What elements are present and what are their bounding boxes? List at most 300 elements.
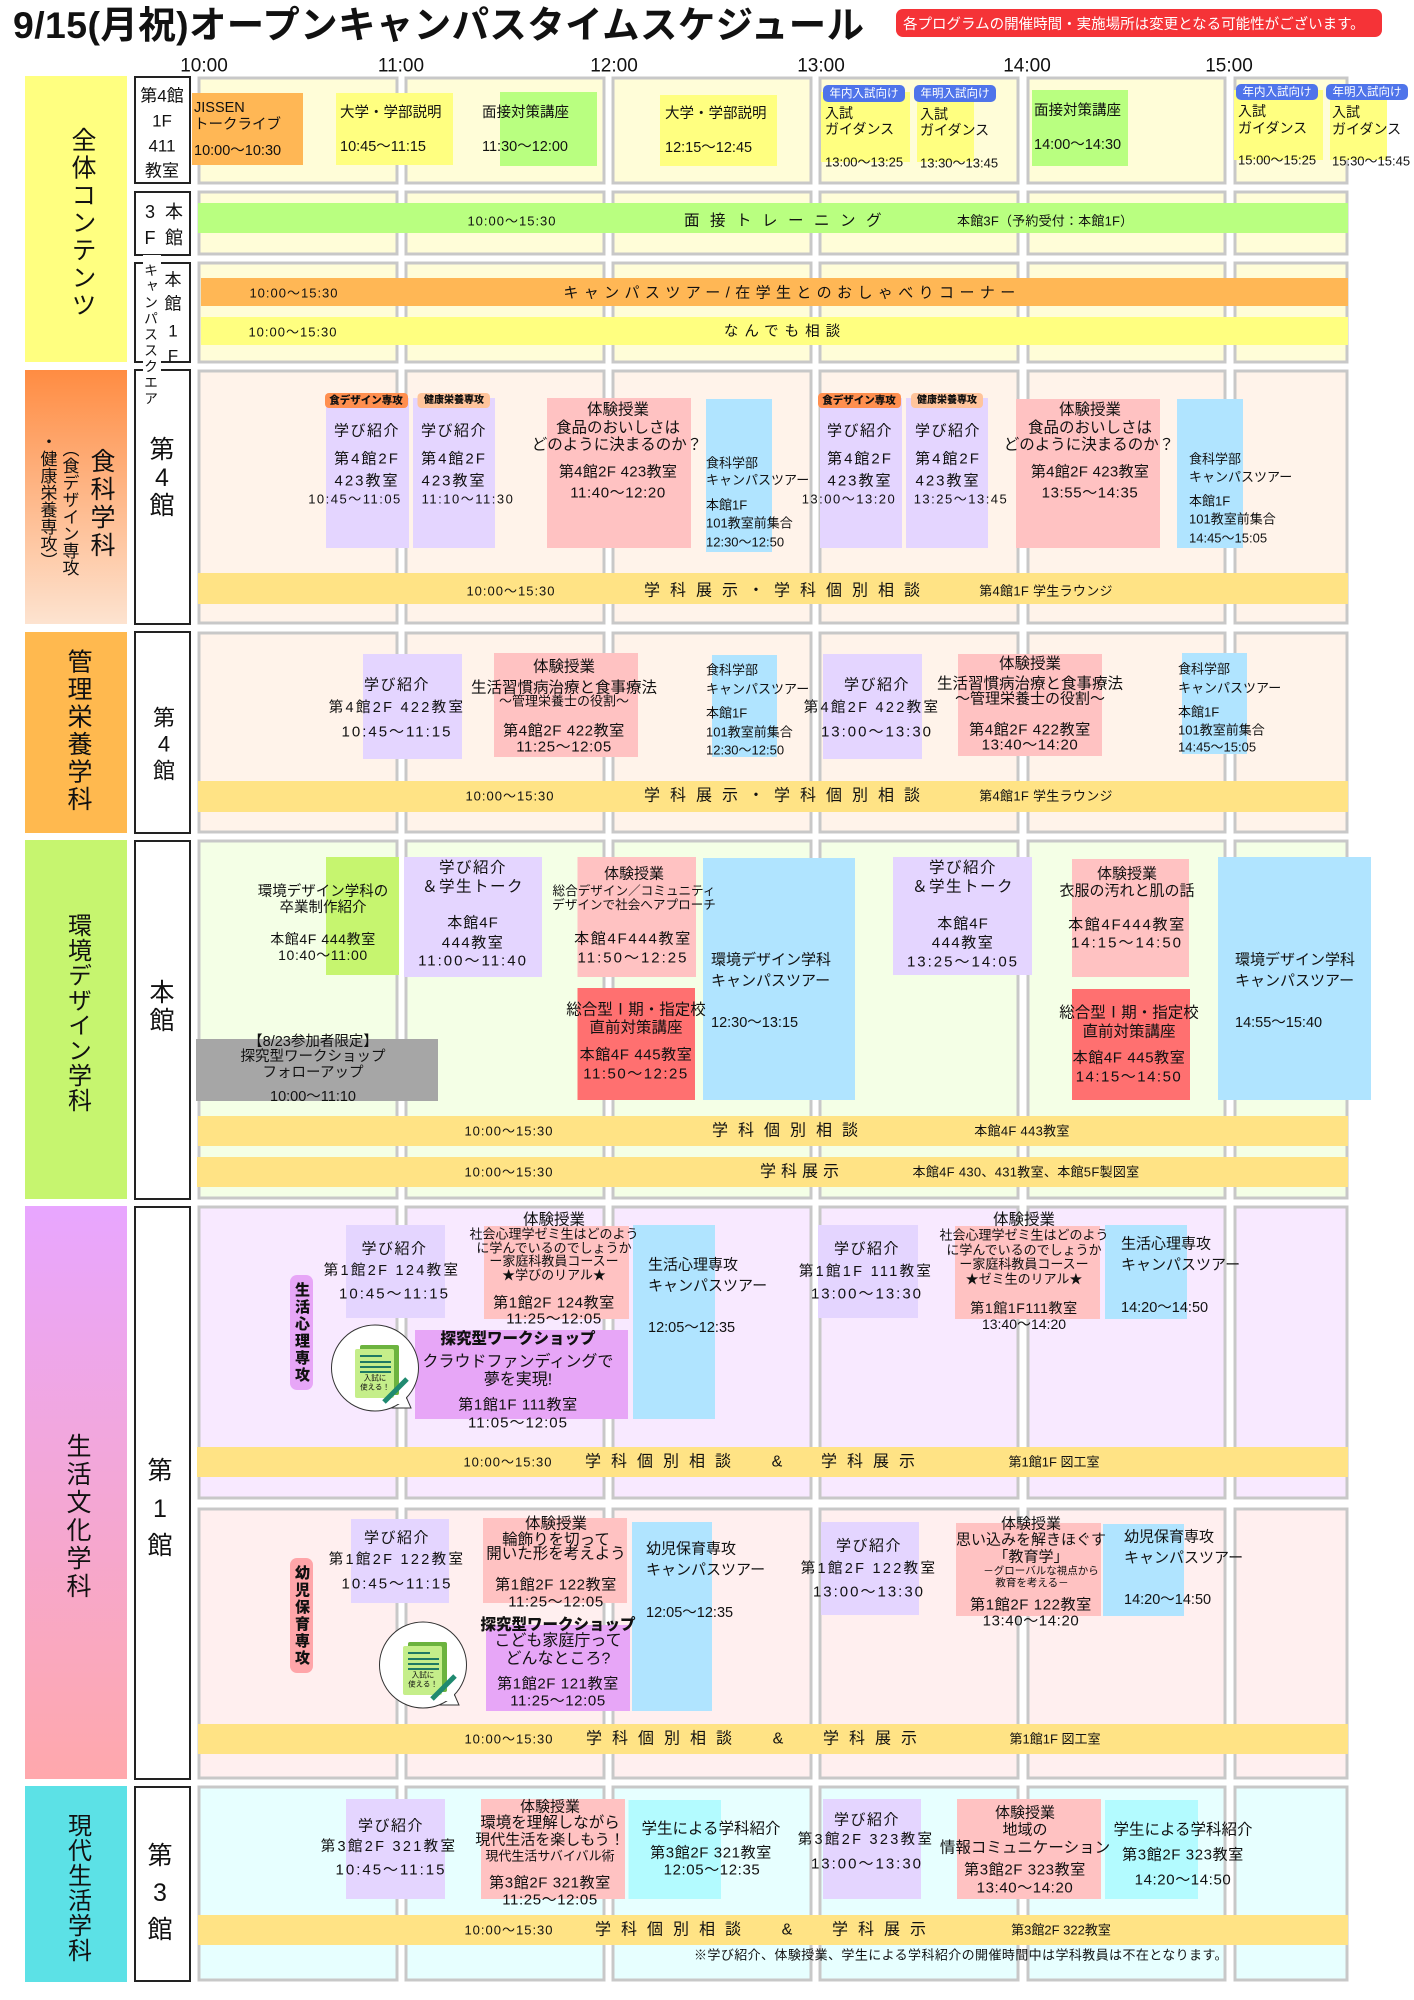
section label: 食科学科: 食科学科 (87, 448, 116, 560)
band: 学科個別相談 & 学科展示 (幼児保育) (198, 1724, 1348, 1754)
building: 第4館: 館 (153, 758, 175, 784)
event: 食科学部キャンパスツアー 14:45 (1178, 653, 1281, 754)
event: 総合型Ⅰ期・指定校 直前対策講座 11:50: 本館4F 445教室 (580, 1046, 692, 1064)
panel: 環境デザイン学科 (25, 840, 1371, 1199)
event: 学び紹介 13:00: 学び紹介 (834, 1240, 900, 1258)
event: 探究型ワークショップ クラウドファンディング: 11:05～12:05 (468, 1414, 568, 1432)
footnote: ※学び紹介、体験授業、学生による学科紹介の開催時間中は学科教員は不在となります。 (694, 1948, 1228, 1962)
event: 学び紹介＆学生トーク 11:00: 本館4F (447, 914, 499, 932)
band: 学科個別相談 & 学科展示 (幼児保育): & (773, 1730, 784, 1748)
event: 体験授業 14:15 (1059, 859, 1195, 977)
event: 面接対策講座 2: 面接対策講座 (1034, 102, 1121, 119)
event: 学生による学科紹介 12:05: 第3館2F 321教室 (650, 1844, 772, 1862)
event: 学び紹介 食デザイン 10:45: 第4館2F (334, 450, 400, 468)
event: 体験授業 13:40: 思い込みを解きほぐす (956, 1532, 1106, 1548)
event: 学び紹介 健康栄養 11:10 (413, 393, 514, 548)
event: 体験授業 13:40 (940, 1799, 1110, 1899)
event: 体験授業 13:55: 第4館2F 423教室 (1031, 464, 1149, 480)
event: 体験授業 13:40: 地域の (1002, 1822, 1048, 1838)
building: 第4館: 第 (153, 706, 175, 730)
event: 学生による学科紹介 12:05: 12:05～12:35 (664, 1862, 760, 1878)
event: JISSENトークライブ: 10:00～10:30 (194, 143, 281, 159)
band: 学科展示・学科個別相談: 10:00～15:30 (466, 584, 556, 598)
section label: 環境デザイン学科 (25, 840, 127, 1199)
event: 体験授業 11:25: ～管理栄養士の役割～ (499, 694, 629, 708)
event: 体験授業 13:40: ～管理栄養士の役割～ (955, 690, 1105, 708)
event: 学び紹介 健康栄養 13:25: 423教室 (915, 472, 981, 490)
event: 学び紹介 10:45: 10:45～11:15 (342, 1576, 452, 1592)
event: 学び紹介 食デザイン 13:00: 食デザイン専攻 (822, 394, 896, 406)
event: 学び紹介 13:00: 13:00～13:30 (811, 1286, 923, 1302)
event: 体験授業 11:50 (552, 857, 716, 977)
event: 学び紹介 食デザイン 13:00: 423教室 (827, 472, 893, 490)
event: 体験授業 13:40: 第4館2F 422教室 (969, 722, 1091, 738)
event: 体験授業 11:25: に学んでいるのでしょうか (476, 1240, 632, 1256)
event: JISSENトークライブ: トークライブ (194, 115, 281, 133)
event: 入試ガイダンス 15:00: 15:00～15:25 (1238, 152, 1316, 168)
event: 入試ガイダンス 13:30 (914, 85, 998, 170)
event: 環境デザイン学科キャンパスツアー 14:55 (1218, 857, 1371, 1100)
grid row (199, 633, 1347, 832)
event: 面接対策講座 1: 面接対策講座 (482, 104, 569, 121)
event: 学び紹介＆学生トーク 11:00: 学び紹介 (439, 858, 507, 876)
event: 総合型Ⅰ期・指定校 直前対策講座 14:15 (1059, 989, 1199, 1100)
event: 学び紹介 13:00: 学び紹介 (836, 1538, 902, 1554)
event: 大学・学部説明 1 (336, 93, 453, 165)
event: 体験授業 13:40: 「教育学」 (993, 1548, 1069, 1566)
event: 体験授業 11:25: 体験授業 (520, 1798, 580, 1816)
building: 第4館1F411教室: 411 (148, 136, 176, 156)
event: 卒業制作紹介: 10:40～11:00 (278, 947, 368, 963)
event: 学び紹介 10:45 (324, 1225, 460, 1318)
time axis: 14:00 (1003, 56, 1051, 76)
event: 体験授業 13:55: 13:55～14:35 (1042, 484, 1138, 502)
event: 体験授業 13:40: ー家庭科教員コースー (959, 1256, 1089, 1272)
band: 学科個別相談 & 学科展示: 第3館2F 322教室 (1011, 1922, 1111, 1938)
panel: 食科学科 (25, 370, 1348, 624)
icon: 入試に使える speech bubble: 使える！ (360, 1382, 390, 1392)
band: 学科個別相談 & 学科展示 (198, 1915, 1348, 1945)
event: 生活心理専攻キャンパスツアー 12:05: 生活心理専攻 (648, 1256, 738, 1274)
event: 体験授業 13:40: 情報コミュニケーション (940, 1838, 1110, 1856)
event: 学び紹介 健康栄養 11:10: 健康栄養専攻 (424, 393, 484, 406)
band: 学科個別相談 & 学科展示 (生活心理): 学科個別相談 (585, 1452, 741, 1470)
event: 学び紹介 食デザイン 10:45: 食デザイン専攻 (329, 394, 403, 406)
event: 学び紹介＆学生トーク 13:25 (893, 857, 1032, 975)
event: 体験授業 11:25: 体験授業 (523, 1210, 585, 1228)
section label: 食科学科: （食デザイン専攻 (60, 440, 79, 576)
event: 体験授業 13:40: 体験授業 (993, 1210, 1055, 1228)
event: 体験授業 14:15: 本館4F444教室 (1068, 916, 1186, 934)
section label: 現代生活学科 (25, 1786, 127, 1982)
event: 食科学部キャンパスツアー 12:30: 12:30～12:50 (706, 534, 784, 550)
event: 体験授業 11:25: 輪飾りを切って (502, 1530, 610, 1548)
band: 学科展示: 本館4F 430、431教室、本館5F製図室 (913, 1164, 1139, 1180)
band: 学科展示 (197, 1157, 1348, 1187)
event: 体験授業 11:25: 生活習慣病治療と食事療法 (471, 678, 657, 696)
event: 体験授業 11:25: 現代生活を楽しもう！ (475, 1832, 625, 1848)
event: 学び紹介＆学生トーク 13:25: 444教室 (932, 934, 994, 952)
section label: 現代生活学科: 現代生活学科 (64, 1813, 92, 1963)
building: 本館3F: 3 (145, 202, 155, 222)
event: 総合型Ⅰ期・指定校 直前対策講座 14:15: 総合型Ⅰ期・指定校 (1059, 1004, 1199, 1022)
grid row 3 (199, 263, 1347, 362)
event: JISSENトークライブ (192, 93, 303, 165)
event: 探究型ワークショップ クラウドファンディング: 夢を実現! (484, 1370, 552, 1388)
event: 体験授業 11:40: 11:40～12:20 (570, 484, 666, 502)
event: 探究型ワークショップ こども家庭庁: どんなところ? (506, 1650, 611, 1668)
event: 探究型ワークショップ クラウドファンディング (415, 1328, 628, 1432)
event: 学び紹介 食デザイン 13:00: 学び紹介 (827, 422, 893, 440)
event: 体験授業 13:40: 体験授業 (995, 1804, 1055, 1822)
event: 学び紹介 食デザイン 13:00: 第4館2F (827, 450, 893, 468)
event: 体験授業 13:40: －グローバルな視点から (983, 1564, 1099, 1577)
grid row: 幼児保育専攻 (199, 1509, 1347, 1778)
event: 体験授業 13:40 (939, 1210, 1109, 1332)
event: 学び紹介 10:45: 第1館2F 124教室 (324, 1262, 460, 1279)
building: 本館3F: F (144, 228, 156, 248)
panel: 全体コンテンツ (25, 76, 1410, 366)
band: 学科個別相談 (198, 1116, 1348, 1146)
tag: 幼児保育専攻: 幼児保育専攻 (293, 1564, 310, 1667)
title: 9/15(月祝)オープンキャンパスタイムスケジュール (13, 4, 864, 46)
event: 入試ガイダンス 15:00: ガイダンス (1238, 120, 1307, 136)
grid row 1 (199, 78, 1347, 183)
event: 生活心理専攻キャンパスツアー 12:05: 12:05～12:35 (648, 1320, 735, 1336)
event: 総合型Ⅰ期・指定校 直前対策講座 14:15: 直前対策講座 (1082, 1022, 1176, 1040)
event: 探究型ワークショップ フォローアップ: 【8/23参加者限定】 (248, 1033, 378, 1050)
band: 学科展示・学科個別相談: 学科展示・学科個別相談 (644, 786, 930, 804)
section label: 管理栄養学科: 管理栄養学科 (64, 648, 92, 814)
event: 学び紹介 10:45: 学び紹介 (361, 1240, 428, 1258)
event: 学び紹介 13:00: 13:00～13:30 (821, 724, 933, 740)
event: 生活心理専攻キャンパスツアー 14:20: 14:20～14:50 (1121, 1300, 1208, 1316)
event: 体験授業 11:40: 体験授業 (587, 400, 649, 418)
building: 第1館: 1 (153, 1495, 167, 1523)
band: 学科展示・学科個別相談: 第4館1F 学生ラウンジ (979, 788, 1113, 804)
event: 体験授業 11:25 (475, 1798, 625, 1908)
event: 体験授業 11:25: 環境を理解しながら (480, 1814, 620, 1832)
event: 体験授業 13:40: 教育を考える－ (995, 1576, 1069, 1589)
event: 食科学部キャンパスツアー 12:30: 食科学部 (706, 662, 758, 678)
event: 学び紹介 健康栄養 13:25: 13:25～13:45 (914, 492, 1008, 506)
tag: 生活心理専攻: 生活心理専攻 (293, 1281, 310, 1384)
grid row 2 (199, 192, 1347, 254)
event: 探究型ワークショップ フォローアップ: 探究型ワークショップ (240, 1048, 386, 1065)
building: 本館1F: F (168, 346, 178, 366)
event: 食科学部キャンパスツアー 14:45: 本館1F (1189, 494, 1230, 508)
event: 入試ガイダンス 15:00: 入試 (1238, 103, 1266, 119)
band: なんでも相談: なんでも相談 (724, 323, 846, 340)
event: 食科学部キャンパスツアー 14:45: 101教室前集合 (1178, 722, 1265, 738)
event: 体験授業 13:40: 第1館2F 122教室 (970, 1596, 1092, 1614)
event: 体験授業 11:50: 本館4F444教室 (574, 930, 692, 948)
event: 入試ガイダンス 13:30: ガイダンス (920, 122, 989, 138)
event: 体験授業 13:55: 体験授業 (1059, 400, 1121, 418)
event: 学び紹介 13:00 (801, 1522, 937, 1615)
band: 学科個別相談: 10:00～15:30 (464, 1124, 554, 1138)
event: 幼児保育専攻キャンパスツアー 12:05: 12:05～12:35 (646, 1605, 733, 1621)
event: 幼児保育専攻キャンパスツアー 14:20: キャンパスツアー (1124, 1550, 1243, 1566)
event: 学び紹介 食デザイン 13:00: 13:00～13:20 (802, 492, 896, 506)
building: 第4館: 4 (155, 464, 169, 492)
band: 学科展示・学科個別相談 (198, 781, 1348, 812)
event: 入試ガイダンス 13:30: 年明入試向け (920, 86, 990, 100)
event: 学生による学科紹介 14:20: 学生による学科紹介 (1113, 1820, 1253, 1838)
event: 食科学部キャンパスツアー 12:30: 本館1F (706, 706, 747, 720)
event: 食科学部キャンパスツアー 14:45: キャンパスツアー (1189, 470, 1292, 484)
building: 第3館: 館 (147, 1916, 173, 1944)
building: 本館3F (135, 192, 190, 255)
building: 本館: 本 (149, 979, 175, 1007)
grid row (199, 841, 1347, 1198)
event: 探究型ワークショップ こども家庭庁: 11:25～12:05 (510, 1692, 606, 1710)
event: 学び紹介 健康栄養 13:25: 健康栄養専攻 (917, 393, 977, 406)
event: 学び紹介 10:45 (321, 1799, 457, 1899)
event: 学び紹介 10:45: 学び紹介 (358, 1818, 424, 1834)
event: 学び紹介 13:00 (804, 654, 940, 759)
event: 入試ガイダンス 15:00: 年内入試向け (1242, 84, 1312, 98)
building: 第4館1F411教室: 1F (152, 112, 172, 130)
band: 学科個別相談: 学科個別相談 (712, 1122, 868, 1140)
event: 体験授業 13:40: 体験授業 (999, 654, 1061, 672)
event: 学び紹介 13:00 (799, 1225, 933, 1318)
event: 体験授業 11:40: どのように決まるのか？ (532, 436, 702, 454)
event: 学び紹介 食デザイン 10:45: 学び紹介 (334, 422, 400, 440)
event: 学び紹介 10:45: 第3館2F 321教室 (321, 1838, 457, 1855)
event: 探究型ワークショップ クラウドファンディング: 探究型ワークショップ (440, 1328, 596, 1348)
building: 第4館1F411教室 (135, 77, 190, 183)
event: 学び紹介 13:00 (798, 1799, 934, 1899)
event: 体験授業 14:15: 衣服の汚れと肌の話 (1059, 882, 1195, 900)
band: 面接トレーニング: 10:00～15:30 (467, 214, 557, 228)
event: 環境デザイン学科キャンパスツアー 12:30: 12:30～13:15 (711, 1015, 798, 1031)
band: 学科個別相談 & 学科展示 (生活心理): 学科展示 (821, 1452, 925, 1470)
event: 食科学部キャンパスツアー 14:45: 14:45～15:05 (1189, 530, 1267, 546)
event: 学生による学科紹介 14:20: 第3館2F 323教室 (1122, 1846, 1244, 1864)
event: 体験授業 13:40: 第1館1F111教室 (970, 1300, 1078, 1316)
event: 学び紹介 13:00: 13:00～13:30 (811, 1856, 923, 1872)
event: 体験授業 13:40: 体験授業 (1001, 1516, 1061, 1532)
time axis: 11:00 (378, 56, 424, 76)
panel: 管理栄養学科 (25, 632, 1348, 833)
event: 体験授業 11:50: 体験授業 (604, 866, 664, 882)
event: 食科学部キャンパスツアー 12:30 (706, 655, 809, 758)
event: 学び紹介 10:45 (329, 1519, 465, 1603)
event: 食科学部キャンパスツアー 14:45: 食科学部 (1178, 662, 1230, 676)
event: 大学・学部説明 2 (660, 95, 777, 166)
event: 体験授業 13:40: ★ゼミ生のリアル★ (966, 1272, 1082, 1286)
event: 生活心理専攻キャンパスツアー 14:20 (1105, 1225, 1240, 1319)
event: 学び紹介 10:45: 10:45～11:15 (342, 724, 452, 740)
event: 学び紹介 食デザイン 10:45 (308, 393, 409, 548)
event: 探究型ワークショップ こども家庭庁: こども家庭庁って (494, 1632, 622, 1650)
band: 学科個別相談 & 学科展示 (幼児保育): 第1館1F 図工室 (1009, 1732, 1101, 1746)
band: 学科個別相談 & 学科展示: 学科展示 (832, 1920, 936, 1938)
event: 卒業制作紹介 (258, 857, 399, 975)
event: 食科学部キャンパスツアー 12:30: 101教室前集合 (706, 516, 793, 530)
section label: 全体コンテンツ: 全体コンテンツ (68, 127, 96, 319)
band: 学科展示・学科個別相談: 学科展示・学科個別相談 (644, 582, 930, 600)
building: 第4館 (135, 370, 190, 624)
event: 体験授業 13:55 (1004, 399, 1174, 548)
event: 体験授業 14:15: 14:15～14:50 (1071, 934, 1183, 952)
event: 学び紹介 10:45: 学び紹介 (364, 1530, 430, 1546)
event: 学び紹介 13:00: 第1館2F 122教室 (801, 1560, 937, 1577)
panel: 生活文化学科 (25, 1206, 1348, 1779)
band: 学科個別相談: 本館4F 443教室 (974, 1124, 1070, 1138)
event: 体験授業 11:25: 第3館2F 321教室 (489, 1874, 611, 1892)
icon: 入試に使える speech bubble (332, 1325, 418, 1411)
tag: 生活心理専攻 (290, 1275, 313, 1390)
event: 食科学部キャンパスツアー 14:45: 本館1F (1178, 704, 1219, 720)
event: 幼児保育専攻キャンパスツアー 14:20 (1103, 1524, 1243, 1616)
event: 学生による学科紹介 12:05: 学生による学科紹介 (641, 1820, 781, 1838)
building: 本館 (135, 841, 190, 1199)
event: 体験授業 13:40: 13:40～14:20 (977, 1880, 1073, 1896)
event: 卒業制作紹介: 卒業制作紹介 (280, 899, 367, 916)
band: 学科個別相談 & 学科展示 (幼児保育): 学科展示 (823, 1730, 927, 1748)
event: 食科学部キャンパスツアー 12:30: 食科学部 (706, 456, 758, 470)
event: 学び紹介 食デザイン 10:45: 10:45～11:05 (308, 492, 402, 506)
event: 学び紹介 13:00: 13:00～13:30 (813, 1584, 925, 1600)
event: 面接対策講座 1: 11:30～12:00 (482, 139, 568, 155)
building: 本館3F: 本 (165, 202, 183, 222)
section label: 管理栄養学科 (25, 632, 127, 833)
event: 入試ガイダンス 15:00 (1234, 84, 1323, 168)
event: 大学・学部説明 2: 大学・学部説明 (665, 105, 766, 122)
section label: 環境デザイン学科: 環境デザイン学科 (64, 913, 92, 1113)
event: 学び紹介 10:45: 第1館2F 122教室 (329, 1551, 465, 1568)
building: 第4館: 4 (158, 732, 170, 756)
building: 本館1F: 館 (164, 294, 182, 314)
event: 環境デザイン学科キャンパスツアー 12:30 (703, 858, 855, 1100)
event: 体験授業 11:25: 体験授業 (533, 658, 595, 676)
event: 環境デザイン学科キャンパスツアー 14:55: 環境デザイン学科 (1235, 950, 1355, 968)
event: 環境デザイン学科キャンパスツアー 14:55: 14:55～15:40 (1235, 1015, 1322, 1031)
building: 第1館: 第 (147, 1457, 173, 1485)
event: 学び紹介 食デザイン 10:45: 423教室 (334, 472, 400, 490)
event: 探究型ワークショップ こども家庭庁: 第1館2F 121教室 (497, 1676, 619, 1692)
event: 体験授業 11:25 (469, 1210, 639, 1328)
event: 大学・学部説明 1: 10:45～11:15 (340, 139, 426, 155)
event: 体験授業 11:25: 第1館2F 122教室 (495, 1576, 617, 1594)
event: 食科学部キャンパスツアー 14:45 (1177, 399, 1292, 548)
time axis: 15:00 (1205, 56, 1253, 76)
icon: 入試に使える speech bubble: 使える！ (408, 1678, 438, 1688)
event: 学び紹介 健康栄養 11:10: 11:10～11:30 (422, 492, 514, 506)
event: 体験授業 13:40: 第3館2F 323教室 (964, 1862, 1086, 1878)
event: 学び紹介 健康栄養 11:10: 第4館2F (421, 450, 487, 468)
grid row (199, 1787, 1347, 1980)
event: 体験授業 11:25: ー家庭科教員コースー (489, 1254, 619, 1268)
event: 学び紹介 健康栄養 11:10: 学び紹介 (421, 422, 487, 440)
building: 第4館1F411教室: 教室 (145, 162, 179, 180)
event: 学び紹介 10:45: 学び紹介 (364, 676, 430, 694)
event: 入試ガイダンス 15:30: 15:30～15:45 (1332, 154, 1410, 168)
event: 学び紹介 13:00: 第1館1F 111教室 (799, 1263, 933, 1280)
event: 学び紹介 健康栄養 13:25: 学び紹介 (915, 422, 981, 440)
event: 学び紹介 10:45: 10:45～11:15 (336, 1862, 446, 1878)
event: 学び紹介＆学生トーク 13:25: 本館4F (937, 916, 989, 932)
event: 体験授業 11:25: 第4館2F 422教室 (503, 722, 625, 740)
building: 第4館 (135, 632, 190, 833)
band: 学科展示・学科個別相談: 10:00～15:30 (465, 788, 555, 804)
event: 学び紹介＆学生トーク 13:25: ＆学生トーク (912, 878, 1014, 896)
event: 学び紹介 13:00: 第4館2F 422教室 (804, 699, 940, 716)
event: 体験授業 11:50: 総合デザイン／コミュニティ (553, 883, 715, 898)
band: 学科個別相談 & 学科展示 (生活心理) (197, 1447, 1348, 1477)
event: 探究型ワークショップ フォローアップ: フォローアップ (263, 1064, 364, 1081)
event: 学生による学科紹介 14:20 (1105, 1800, 1253, 1899)
tag: 幼児保育専攻 (290, 1558, 313, 1673)
event: 面接対策講座 2 (1032, 90, 1128, 166)
band: キャンパスツアー: キャンパスツアー/在学生とのおしゃべりコーナー (563, 284, 1021, 302)
building: 第4館: 第 (149, 436, 175, 464)
event: 体験授業 13:40: 社会心理学ゼミ生はどのよう (939, 1228, 1109, 1242)
building: 本館1F: 本 (164, 270, 182, 290)
building: 本館3F: 館 (165, 228, 183, 248)
event: 体験授業 11:25: ★学びのリアル★ (502, 1268, 606, 1282)
time axis: 10:00 (180, 56, 228, 76)
event: 食科学部キャンパスツアー 14:45: 14:45～15:05 (1178, 740, 1256, 754)
event: 探究型ワークショップ フォローアップ (196, 1033, 438, 1105)
event: 学び紹介＆学生トーク 13:25: 13:25～14:05 (907, 954, 1019, 970)
event: 探究型ワークショップ フォローアップ: 10:00～11:10 (270, 1089, 356, 1105)
event: 幼児保育専攻キャンパスツアー 12:05: 幼児保育専攻 (646, 1540, 736, 1558)
event: 総合型Ⅰ期・指定校 直前対策講座 11:50: 直前対策講座 (589, 1018, 683, 1036)
event: 環境デザイン学科キャンパスツアー 12:30: 環境デザイン学科 (711, 950, 831, 968)
event: 学び紹介 10:45: 10:45～11:15 (339, 1286, 450, 1302)
event: 体験授業 13:55: どのように決まるのか？ (1004, 436, 1174, 454)
section label: 食科学科: ・健康栄養専攻） (38, 433, 57, 569)
event: 入試ガイダンス 13:00 (821, 85, 910, 170)
notice pill (896, 9, 1382, 37)
event: 食科学部キャンパスツアー 14:45: 食科学部 (1189, 452, 1241, 466)
band: 学科展示: 10:00～15:30 (464, 1164, 554, 1180)
event: 体験授業 13:40: 生活習慣病治療と食事療法 (937, 674, 1123, 692)
event: 幼児保育専攻キャンパスツアー 14:20: 14:20～14:50 (1124, 1592, 1211, 1608)
event: 食科学部キャンパスツアー 12:30: キャンパスツアー (706, 472, 809, 488)
event: 入試ガイダンス 13:00: ガイダンス (825, 121, 894, 137)
event: 体験授業 13:55: 食品のおいしさは (1028, 418, 1152, 436)
event: 学び紹介＆学生トーク 11:00 (404, 857, 542, 977)
event: 体験授業 11:25: 社会心理学ゼミ生はどのよう (469, 1226, 639, 1242)
event: 体験授業 11:25: 11:25～12:05 (516, 738, 612, 756)
event: 学び紹介 13:00: 第3館2F 323教室 (798, 1831, 934, 1848)
event: 生活心理専攻キャンパスツアー 14:20: 生活心理専攻 (1121, 1236, 1211, 1252)
event: 学び紹介 健康栄養 11:10: 423教室 (421, 472, 487, 490)
event: 学び紹介 健康栄養 13:25: 第4館2F (915, 450, 981, 468)
band: 学科個別相談 & 学科展示: 学科個別相談 (595, 1920, 751, 1938)
event: 入試ガイダンス 15:30: 年明入試向け (1332, 84, 1402, 98)
grid row (199, 371, 1347, 623)
event: 体験授業 11:50: 11:50～12:25 (578, 950, 688, 966)
band: なんでも相談: 10:00～15:30 (248, 324, 338, 340)
event: 体験授業 11:25: 現代生活サバイバル術 (485, 1848, 615, 1864)
event: 学生による学科紹介 12:05 (628, 1800, 781, 1899)
event: 入試ガイダンス 15:30: 入試 (1332, 104, 1360, 120)
building: 第3館: 第 (147, 1842, 173, 1870)
band: なんでも相談 (201, 317, 1348, 345)
event: 幼児保育専攻キャンパスツアー 12:05: キャンパスツアー (646, 1562, 765, 1578)
building: 本館1F (135, 263, 190, 366)
event: 探究型ワークショップ クラウドファンディング: クラウドファンディングで (423, 1352, 613, 1370)
event: 大学・学部説明 2: 12:15～12:45 (665, 140, 752, 156)
event: 食科学部キャンパスツアー 12:30 (706, 399, 809, 552)
event: 探究型ワークショップ こども家庭庁: 探究型ワークショップ (480, 1614, 636, 1634)
event: 食科学部キャンパスツアー 12:30: キャンパスツアー (706, 682, 809, 696)
